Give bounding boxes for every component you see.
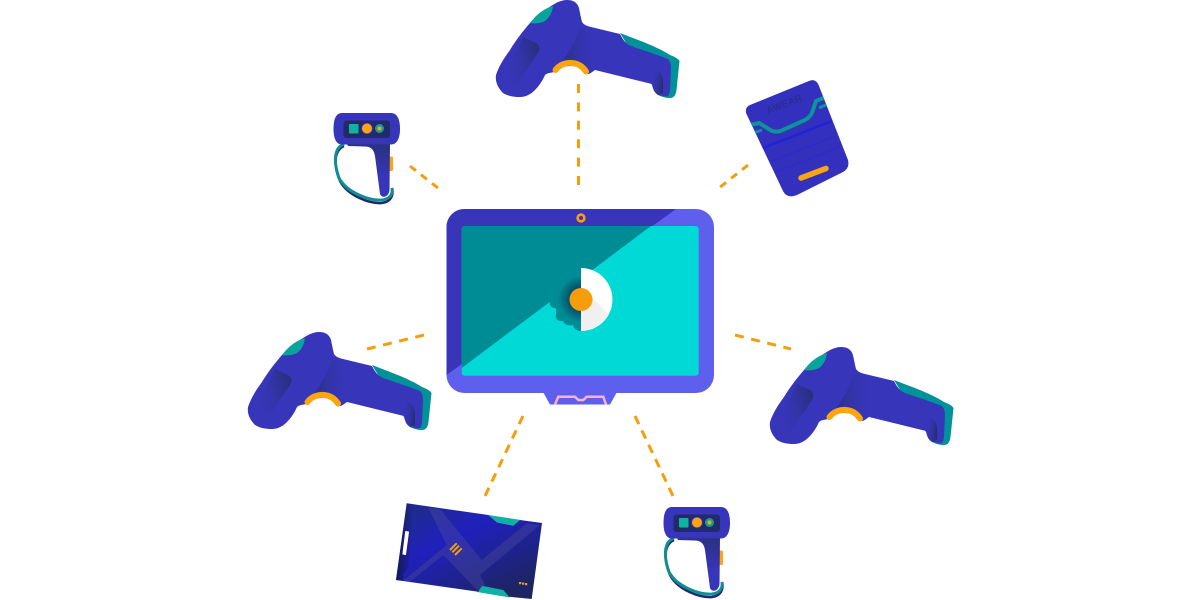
connector: upper-left ring scanner [410, 166, 438, 188]
connector: top scanner [577, 84, 580, 185]
tablet body [446, 209, 714, 393]
mark: orange dots [519, 582, 527, 585]
icon: right barcode scanner [770, 347, 954, 445]
slot: white handle opening [403, 532, 408, 554]
icon: left barcode scanner [248, 332, 432, 430]
connector: bottom ring scanner [635, 416, 673, 496]
infographic: tablet connected to peripheral devices [248, 0, 954, 599]
connector: left scanner [367, 335, 424, 349]
screen dark half [462, 226, 651, 368]
icon: top barcode scanner [496, 0, 680, 98]
icon: upper-left ring scanner [334, 113, 400, 203]
connector: right scanner [735, 335, 791, 349]
connector: wearable device [719, 165, 748, 188]
gear icon [550, 268, 612, 331]
icon: bottom ring scanner [664, 507, 730, 597]
panel: central tablet [446, 209, 714, 404]
icon: handheld phone device [396, 503, 542, 599]
stand connector outline [555, 397, 606, 404]
connector: bottom-left phone [485, 416, 523, 496]
button: orange bar [801, 168, 826, 178]
label: device brand: AWEAR [765, 93, 805, 117]
mark: orange stripes [450, 543, 462, 555]
tablet stand [543, 392, 617, 404]
tablet screen [462, 226, 699, 376]
camera [578, 215, 584, 221]
icon: wearable device [746, 80, 848, 196]
tablet body dark half [446, 209, 676, 375]
